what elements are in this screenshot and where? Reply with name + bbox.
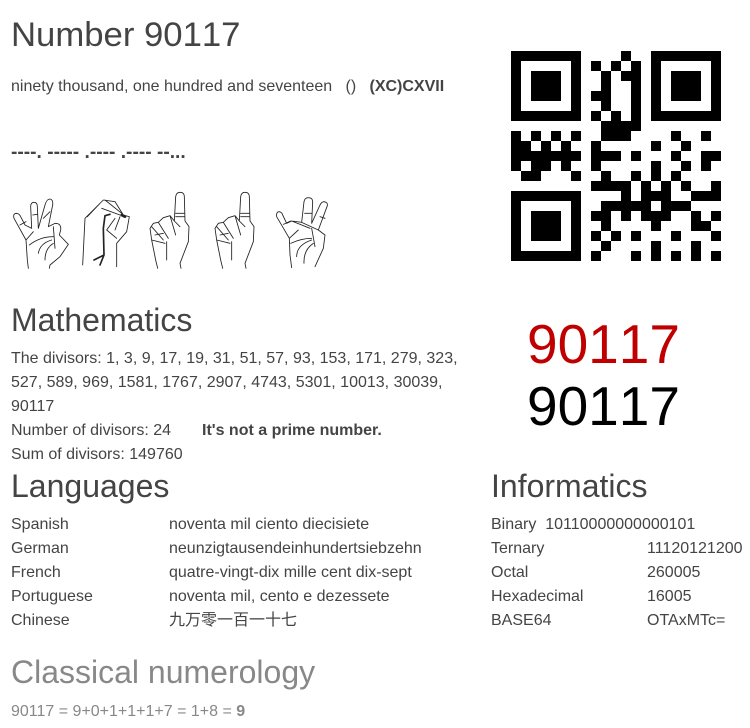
morse code: ----. ----- .---- .---- --... <box>11 142 186 163</box>
sum of divisors: Sum of divisors: 149760 <box>11 446 183 463</box>
hand: one <box>150 192 189 268</box>
divisors list: 90117 <box>11 398 54 415</box>
numerology sum: 90117 = 9+0+1+1+1+7 = 1+8 = 9 <box>11 703 245 720</box>
informatics table: 260005 <box>647 564 700 581</box>
languages table: noventa mil, cento e dezessete <box>169 588 390 605</box>
heading: classical numerology: Classical numerology <box>11 654 315 690</box>
languages table: Chinese <box>11 612 70 629</box>
languages table: French <box>11 564 61 581</box>
informatics table <box>491 516 743 629</box>
languages table <box>11 516 422 629</box>
languages table: Portuguese <box>11 588 93 605</box>
heading: languages: Languages <box>11 468 169 504</box>
hand: nine <box>14 199 68 268</box>
languages table: 九万零一百一十七 <box>169 612 297 629</box>
languages table: German <box>11 540 69 557</box>
number image black: 90117 <box>527 375 680 437</box>
languages table: noventa mil ciento diecisiete <box>169 516 369 533</box>
title: Number 90117 <box>11 16 240 54</box>
number image red: 90117 <box>527 313 680 375</box>
informatics table: BASE64 <box>491 612 551 629</box>
informatics table: 16005 <box>647 588 692 605</box>
number of divisors and prime status: It's not a prime number. <box>202 422 382 439</box>
informatics table: Ternary <box>491 540 544 557</box>
heading: informatics: Informatics <box>491 468 647 504</box>
hand: one <box>215 192 254 268</box>
informatics table: 11120121200 <box>647 540 743 557</box>
languages table: Spanish <box>11 516 69 533</box>
heading: mathematics: Mathematics <box>11 302 192 338</box>
informatics table: Hexadecimal <box>491 588 583 605</box>
number of divisors and prime status: Number of divisors: 24 <box>11 422 171 439</box>
divisors list <box>11 350 458 415</box>
divisors list: The divisors: 1, 3, 9, 17, 19, 31, 51, 57, 93, 153, 171, 279, 323, <box>11 350 458 367</box>
sign language hands <box>13 192 328 269</box>
languages table: quatre-vingt-dix mille cent dix-sept <box>169 564 412 581</box>
number of divisors and prime status <box>11 422 382 439</box>
number in words and roman numeral: ninety thousand, one hundred and seventeen () (XC)CXVII <box>11 78 444 95</box>
informatics table: OTAxMTc= <box>647 612 725 629</box>
divisors list: 527, 589, 969, 1581, 1767, 2907, 4743, 5301, 10013, 30039, <box>11 374 442 391</box>
informatics table: Octal <box>491 564 528 581</box>
QR code <box>511 51 721 261</box>
informatics table: Binary 10110000000000101 <box>491 516 695 533</box>
hand: seven <box>277 198 327 268</box>
languages table: neunzigtausendeinhundertsiebzehn <box>169 540 422 557</box>
hand: zero <box>83 200 129 267</box>
